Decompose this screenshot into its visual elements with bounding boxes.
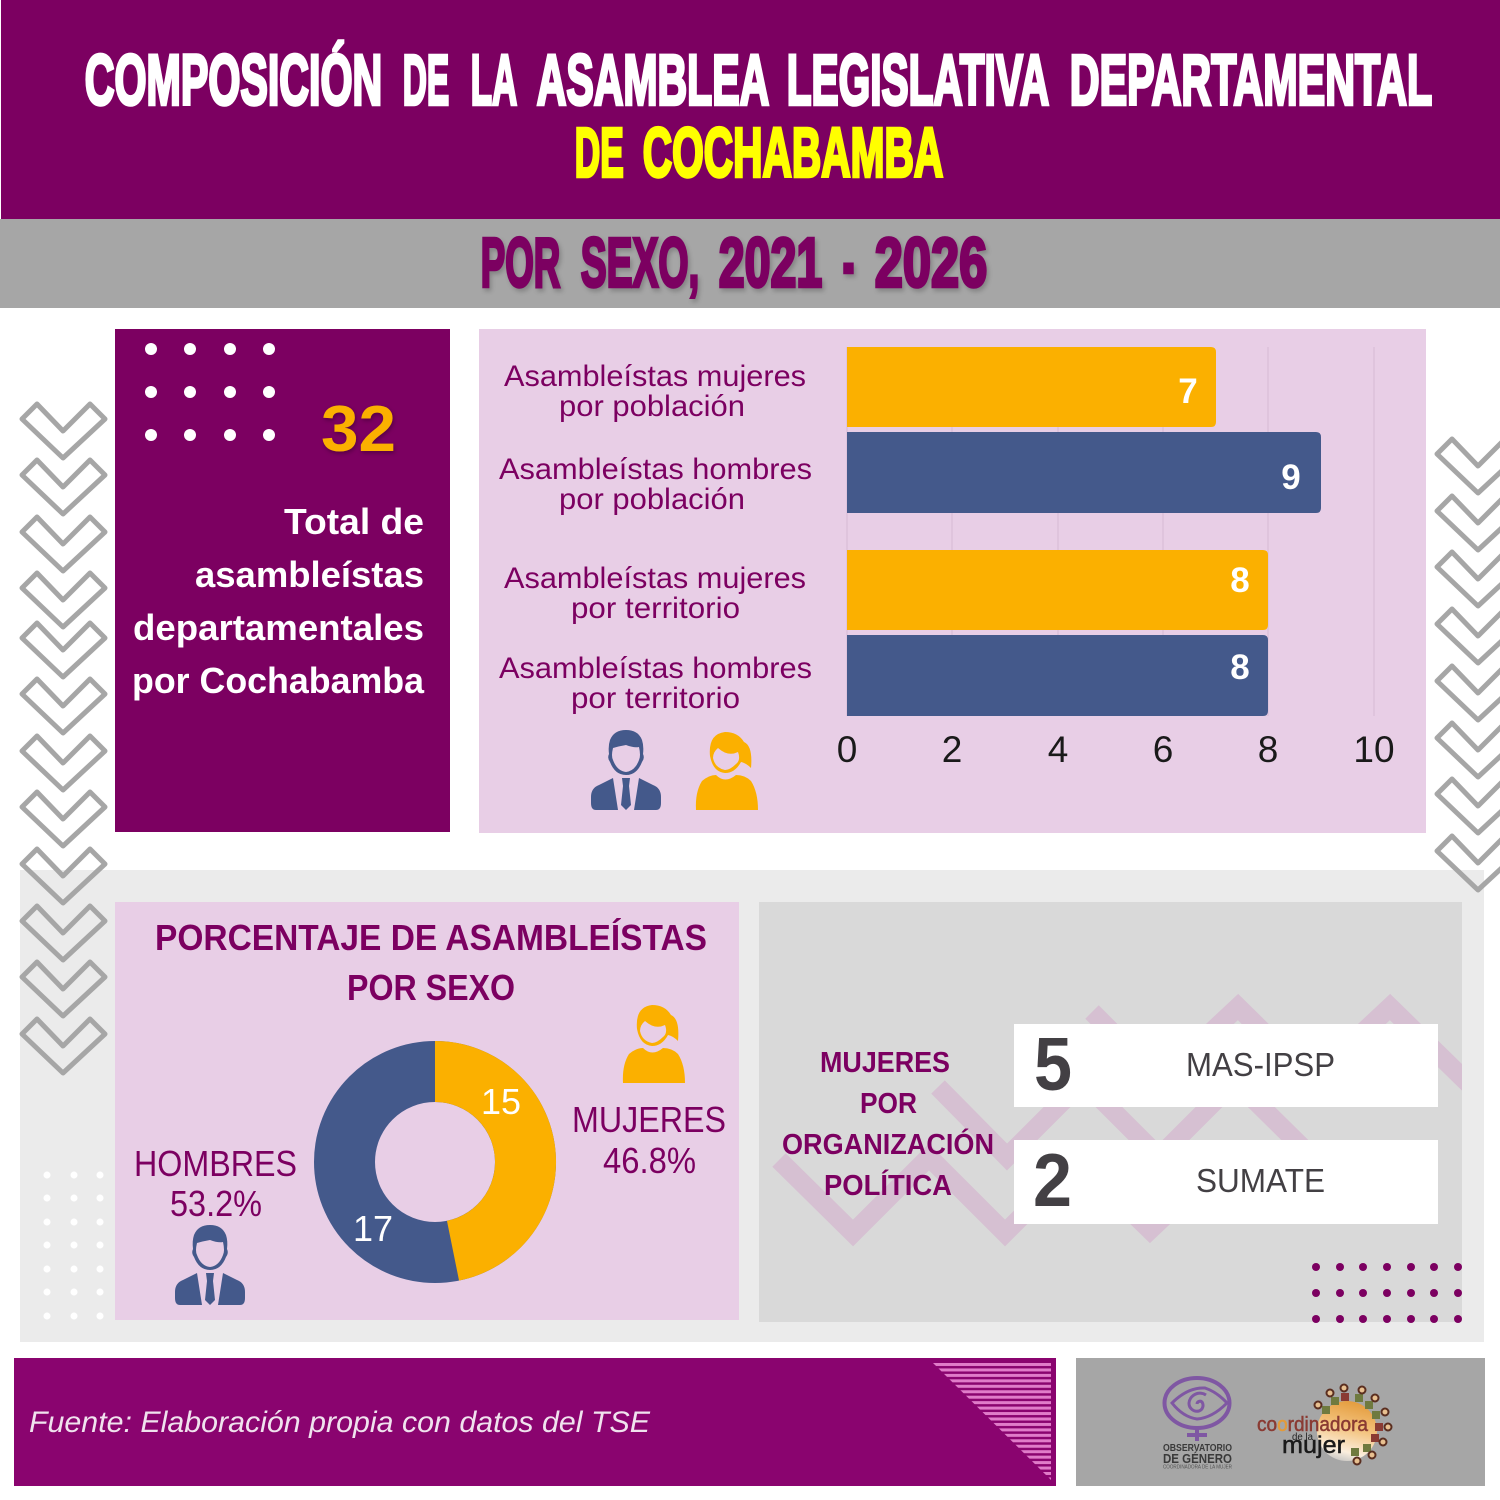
panel: percentage by sex — [115, 902, 739, 1320]
title: COMPOSICIÓN — [85, 41, 382, 120]
row: MAS-IPSP — [1014, 1022, 1438, 1107]
icon: woman — [623, 1005, 685, 1083]
header banner — [1, 0, 1500, 219]
label: mujeres: MUJERES — [572, 1099, 726, 1140]
bars — [847, 347, 1321, 716]
category labels: por territorio — [571, 592, 740, 625]
bars: 9 — [1281, 458, 1301, 497]
logo: observatorio de genero — [1163, 1378, 1232, 1470]
x axis labels: 6 — [1153, 729, 1173, 770]
subtitle band: POR — [481, 223, 560, 301]
subtitle band: - — [843, 223, 854, 301]
title — [85, 41, 1432, 191]
panel: total of assembly members — [115, 329, 450, 832]
total description — [132, 501, 425, 701]
label: hombres — [134, 1143, 297, 1224]
bars: 8 — [1230, 648, 1250, 687]
category labels: Asambleístas hombres — [499, 453, 812, 486]
category labels — [499, 360, 812, 715]
category labels: por población — [559, 483, 745, 516]
logo: coordinadora de la mujer — [1257, 1384, 1392, 1464]
icon: woman — [696, 732, 758, 810]
total number: 32 — [321, 392, 396, 465]
label: hombres: HOMBRES — [134, 1143, 297, 1184]
panel heading — [782, 1047, 994, 1202]
x axis labels: 4 — [1048, 729, 1068, 770]
icon: man — [175, 1225, 245, 1305]
panel heading: POR SEXO — [347, 967, 515, 1008]
logo: observatorio de genero: OBSERVATORIO — [1163, 1443, 1232, 1454]
row: SUMATE — [1014, 1138, 1438, 1224]
subtitle band: 2026 — [875, 223, 987, 301]
subtitle band — [0, 219, 1500, 308]
title: DE — [403, 41, 449, 120]
title: LA — [471, 41, 517, 120]
row: MAS-IPSP: MAS-IPSP — [1186, 1046, 1335, 1083]
panel heading: ORGANIZACIÓN — [782, 1127, 994, 1161]
logo: coordinadora de la mujer: mujer — [1282, 1432, 1345, 1459]
panel: women by political organization — [759, 902, 1475, 1323]
donut chart: 17 — [353, 1208, 393, 1249]
total description: Total de — [284, 501, 424, 542]
total description: asambleístas — [195, 554, 424, 595]
x axis labels: 10 — [1353, 729, 1395, 770]
bars: 7 — [1178, 372, 1198, 411]
panel heading: POLÍTICA — [824, 1168, 952, 1202]
source text: Fuente: Elaboración propia con datos del TSE — [29, 1406, 651, 1439]
icon: man — [591, 730, 661, 810]
donut chart: 15 — [481, 1081, 521, 1122]
title: COCHABAMBA — [643, 113, 943, 191]
x axis labels: 8 — [1258, 729, 1278, 770]
total description: por Cochabamba — [132, 660, 425, 701]
footer source panel — [14, 1358, 1056, 1486]
left chevron column — [22, 404, 105, 846]
panel: bar chart — [479, 329, 1426, 833]
subtitle band: 2021 — [719, 223, 822, 301]
panel heading: PORCENTAJE DE ASAMBLEÍSTAS — [155, 917, 707, 958]
category labels: Asambleístas mujeres — [504, 562, 806, 595]
logo: observatorio de genero: DE GÉNERO — [1163, 1451, 1232, 1466]
category labels: Asambleístas mujeres — [504, 360, 806, 393]
bars: 8 — [1230, 561, 1250, 600]
logo: coordinadora de la mujer: de la — [1292, 1432, 1313, 1443]
label: mujeres: 46.8% — [603, 1140, 696, 1181]
total description: departamentales — [133, 607, 424, 648]
decorative dots grid — [145, 343, 275, 441]
title: LEGISLATIVA — [787, 41, 1049, 120]
right chevron column — [1437, 439, 1500, 833]
logo: coordinadora de la mujer: coordinadora — [1257, 1414, 1369, 1436]
logo: observatorio de genero: COORDINADORA DE LA MUJER — [1163, 1464, 1232, 1470]
row: SUMATE: SUMATE — [1196, 1162, 1325, 1199]
panel heading — [155, 917, 707, 1008]
panel heading: MUJERES — [820, 1047, 950, 1079]
subtitle band: SEXO, — [581, 223, 699, 301]
panel heading: POR — [860, 1088, 917, 1120]
title: ASAMBLEA — [537, 41, 769, 120]
title: DE — [575, 113, 624, 191]
x axis labels: 2 — [942, 729, 962, 770]
category labels: por territorio — [571, 682, 740, 715]
label: mujeres — [572, 1099, 726, 1181]
lower grey band — [20, 836, 1500, 1342]
x axis labels — [837, 729, 1395, 770]
donut chart — [344, 1072, 526, 1252]
row: SUMATE: 2 — [1033, 1138, 1072, 1222]
x axis labels: 0 — [837, 729, 857, 770]
footer logos panel — [1076, 1358, 1485, 1486]
category labels: Asambleístas hombres — [499, 652, 812, 685]
row: MAS-IPSP: 5 — [1034, 1022, 1072, 1106]
category labels: por población — [559, 390, 745, 423]
label: hombres: 53.2% — [170, 1183, 262, 1224]
